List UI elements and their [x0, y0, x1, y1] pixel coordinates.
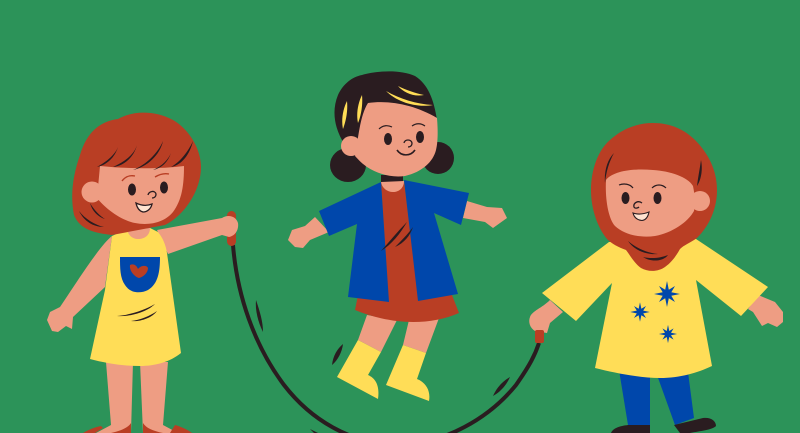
- right girl: rope handle: [535, 330, 544, 343]
- left girl: eyes: [128, 182, 168, 196]
- left girl: right arm: [157, 216, 238, 254]
- middle girl: hair: [334, 71, 437, 150]
- right girl: ear: [690, 191, 710, 211]
- right girl: star decorations: [630, 281, 680, 343]
- middle girl: face: [355, 102, 438, 177]
- middle girl: [288, 71, 507, 401]
- middle girl: blue jacket: [319, 180, 469, 302]
- left girl: eyebrows: [122, 174, 169, 181]
- motion marks around rope: [256, 300, 510, 433]
- left girl: dress fold marks: [117, 304, 157, 321]
- right girl: pants: [619, 370, 694, 425]
- middle girl: right arm: [463, 201, 507, 228]
- right girl: mouth: [633, 212, 649, 220]
- right girl: right arm: [748, 295, 783, 327]
- left girl: neck: [127, 222, 150, 239]
- left girl: legs and feet: [96, 362, 178, 433]
- right girl: headscarf: [591, 123, 717, 271]
- middle girl: hair buns: [330, 142, 454, 182]
- middle girl: dress fold marks: [381, 222, 413, 251]
- right girl: left arm: [529, 300, 563, 333]
- middle girl: eyes: [384, 131, 424, 145]
- left girl: nose: [148, 191, 156, 198]
- right girl: eyes: [622, 192, 662, 204]
- left girl: mouth: [136, 203, 152, 212]
- right girl: shoes: [611, 418, 716, 433]
- middle girl: ear: [341, 136, 361, 156]
- middle girl: neck: [381, 175, 404, 192]
- middle girl: smile: [397, 150, 415, 155]
- left girl: dress: [90, 228, 181, 366]
- middle girl: yellow hair streaks: [342, 86, 433, 129]
- right girl: yellow shirt: [542, 239, 768, 378]
- middle girl: nose: [404, 140, 412, 147]
- right girl: scarf fold marks: [605, 153, 702, 261]
- right girl: nose: [634, 202, 642, 208]
- left girl: sandals: [83, 423, 192, 433]
- middle girl: boots: [337, 340, 429, 401]
- left girl: left arm: [47, 236, 112, 332]
- left girl: pocket with heart: [120, 257, 160, 292]
- middle girl: legs: [358, 315, 439, 353]
- left girl: bangs strands: [79, 141, 193, 227]
- middle girl: eyebrows: [379, 124, 425, 129]
- left girl: [47, 113, 238, 433]
- middle girl: left arm: [288, 217, 329, 248]
- right girl: eyebrows: [619, 184, 666, 188]
- jump rope: [233, 245, 539, 433]
- left girl: face: [97, 166, 184, 224]
- left girl: rope handle: [227, 211, 236, 246]
- right girl: [529, 123, 783, 433]
- right girl: face: [606, 169, 695, 237]
- middle girl: red dress: [355, 181, 459, 322]
- left girl: ear: [82, 182, 102, 202]
- left girl: hair: [72, 113, 201, 235]
